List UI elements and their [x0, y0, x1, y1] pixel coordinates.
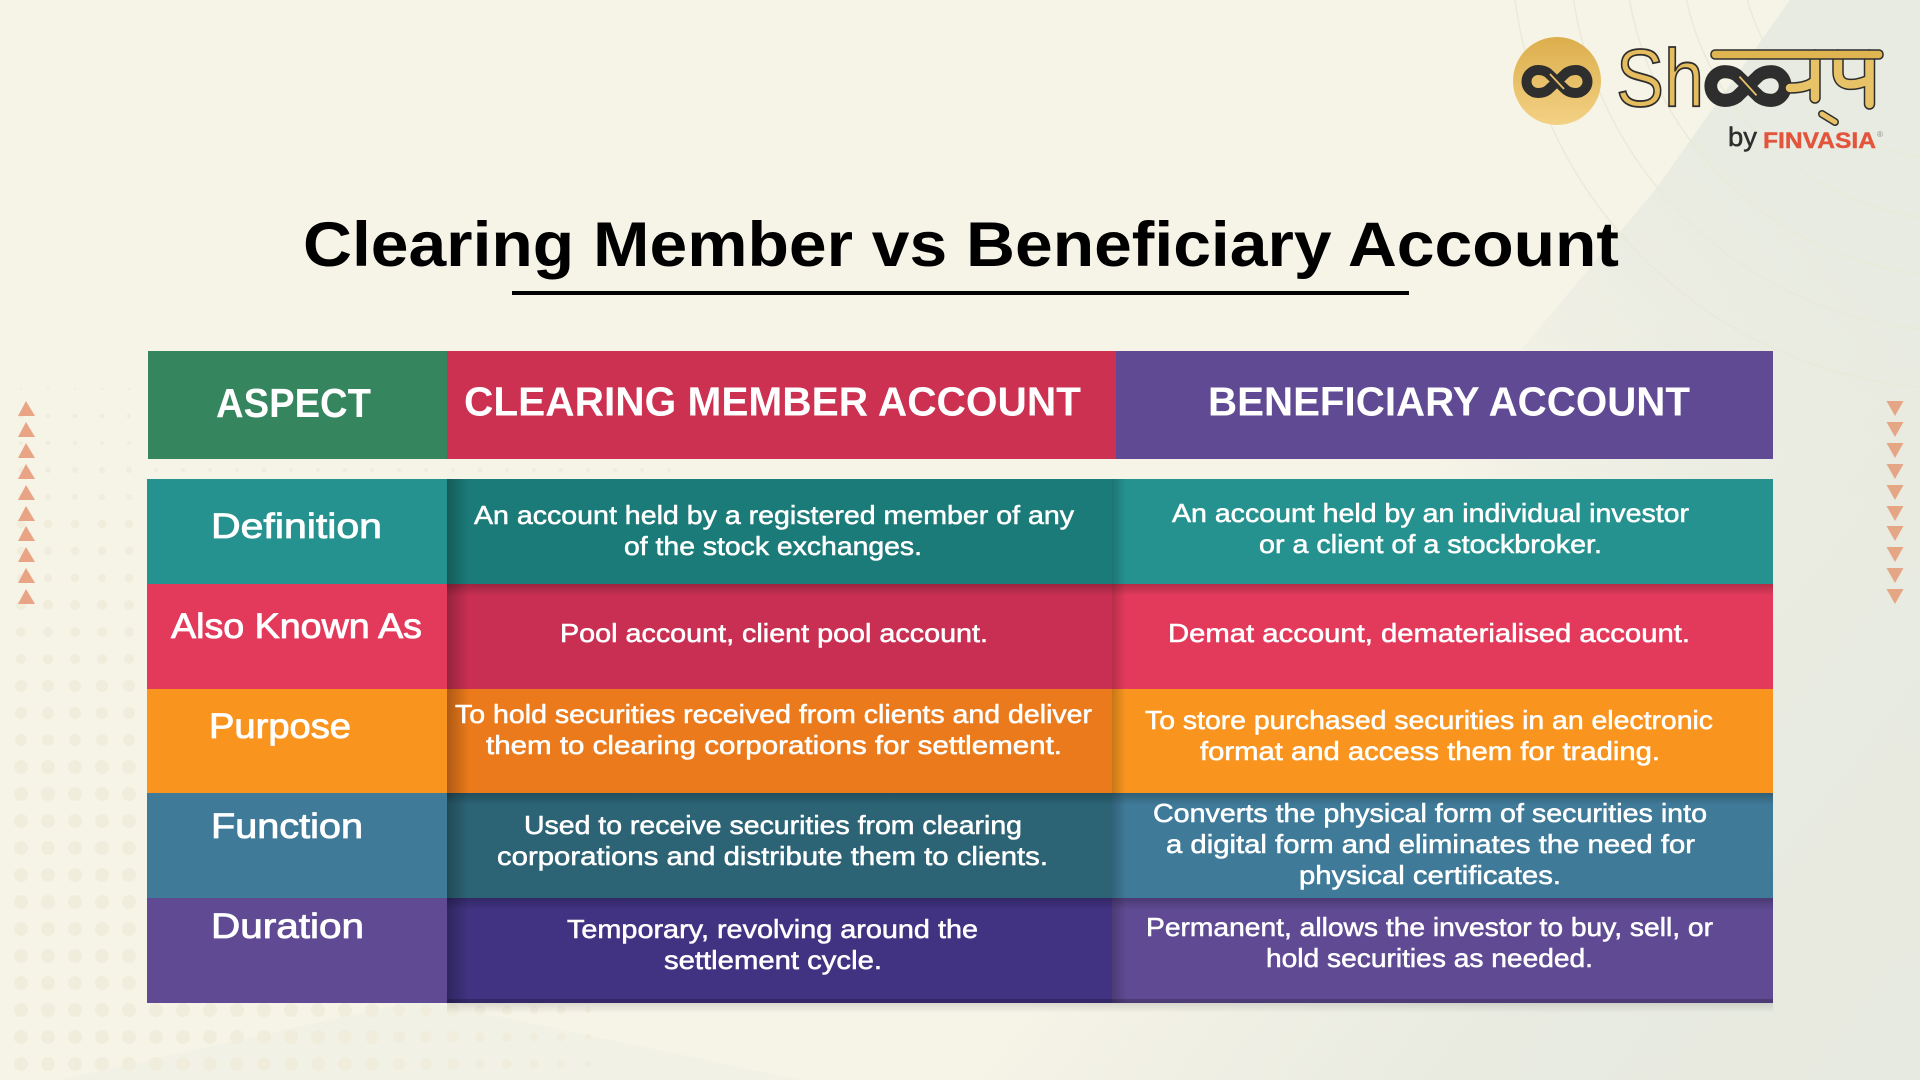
table — [147, 351, 1773, 1013]
header: clearing member account: CLEARING MEMBER ACCOUNT — [464, 378, 1081, 424]
row: purpose: Purpose — [209, 707, 351, 746]
logo — [1513, 33, 1883, 153]
triangles: right column — [1886, 401, 1904, 604]
triangles: left column — [18, 401, 35, 604]
row: also known as: Also Known As — [171, 607, 422, 646]
row: purpose: format and access them for trading. — [1200, 736, 1660, 766]
logo byline: FINVASIA — [1763, 128, 1876, 153]
header: aspect: ASPECT — [216, 380, 371, 426]
row: duration — [147, 898, 1773, 1013]
row: definition: of the stock exchanges. — [624, 531, 922, 561]
header row — [148, 351, 1773, 459]
row: also known as: Pool account, client pool account. — [560, 618, 988, 648]
dot pattern — [8, 376, 682, 1078]
logo byline — [1728, 122, 1883, 153]
row: function: Converts the physical form of securities into — [1153, 798, 1707, 828]
logo byline: by — [1728, 122, 1757, 152]
row: purpose: To store purchased securities in an electronic — [1145, 705, 1713, 735]
row: definition — [147, 479, 1773, 584]
row: purpose: To hold securities received from clients and deliver — [455, 699, 1092, 729]
header: clearing member account — [447, 351, 1116, 459]
row: function: a digital form and eliminates the need for — [1166, 829, 1695, 859]
row: function: Function — [211, 807, 363, 846]
row: function: physical certificates. — [1299, 860, 1561, 890]
logo wordmark: Sh — [1616, 33, 1704, 124]
row: purpose — [147, 689, 1773, 793]
row: function: corporations and distribute them to clients. — [497, 841, 1048, 871]
row: definition: An account held by a registered member of any — [474, 500, 1074, 530]
row: purpose: them to clearing corporations for settlement. — [486, 730, 1062, 760]
header: beneficiary account — [1116, 351, 1773, 459]
row: function: Used to receive securities from clearing — [524, 810, 1022, 840]
row: duration: hold securities as needed. — [1266, 943, 1593, 973]
header: aspect — [148, 351, 448, 459]
row: definition: or a client of a stockbroker. — [1259, 529, 1602, 559]
row: also known as: Demat account, dematerialised account. — [1168, 618, 1690, 648]
row: definition: An account held by an individual investor — [1172, 498, 1689, 528]
row: also known as — [147, 584, 1773, 689]
row: duration: settlement cycle. — [664, 945, 882, 975]
logo badge — [1513, 37, 1601, 125]
header: beneficiary account: BENEFICIARY ACCOUNT — [1208, 378, 1690, 424]
row: duration: Permanent, allows the investor to buy, sell, or — [1146, 912, 1713, 942]
row: definition: Definition — [211, 507, 382, 546]
row: duration: Temporary, revolving around the — [567, 914, 978, 944]
logo byline: ® — [1877, 130, 1883, 139]
row: function — [147, 793, 1773, 898]
title: Clearing Member vs Beneficiary Account — [303, 210, 1619, 280]
row: duration: Duration — [211, 907, 364, 946]
logo wordmark — [1616, 33, 1883, 124]
